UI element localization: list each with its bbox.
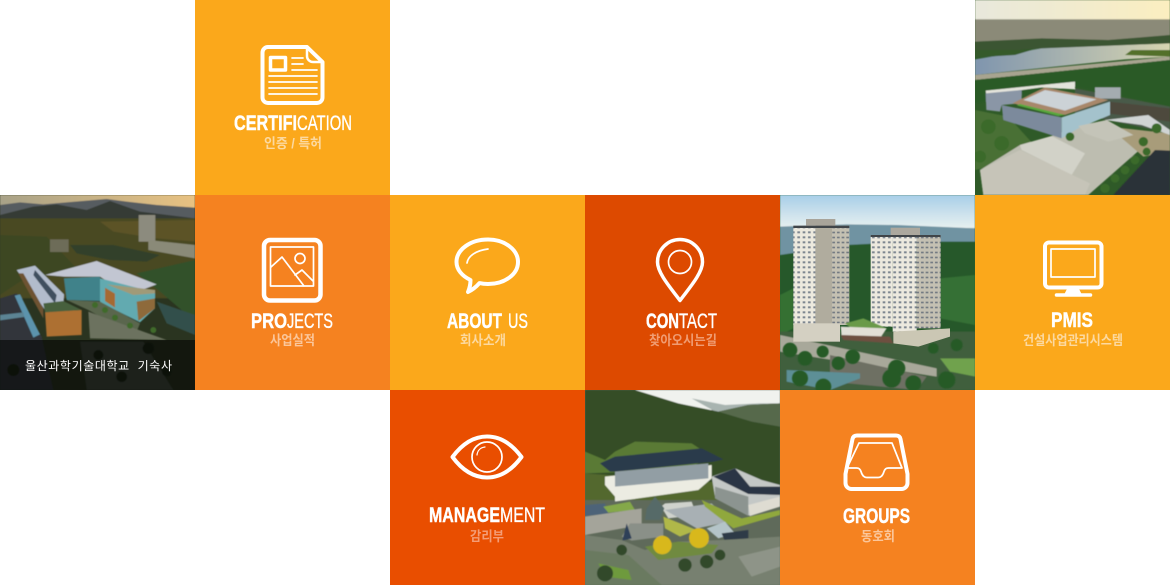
panel: projects	[195, 195, 390, 390]
icon: document	[262, 47, 322, 103]
photo: government hall	[585, 390, 780, 585]
caption bar	[0, 340, 195, 390]
subheading: 동호회	[861, 529, 895, 544]
heading: GROUPS	[843, 505, 910, 528]
panel: about us	[390, 195, 585, 390]
subheading: 사업실적	[270, 333, 315, 348]
heading: JECTS	[287, 310, 333, 333]
icon: map pin	[658, 240, 702, 300]
heading	[251, 310, 333, 333]
subheading: 회사소개	[460, 333, 506, 348]
heading: MENT	[500, 504, 545, 527]
icon: speech bubble	[456, 240, 518, 292]
heading: MANAGE	[429, 504, 500, 527]
tower left	[793, 219, 849, 342]
subheading: 건설사업관리시스템	[1023, 333, 1123, 348]
panel: management	[390, 390, 585, 585]
heading: PMIS	[1051, 309, 1093, 332]
tower right	[871, 228, 950, 347]
heading: PRO	[251, 310, 287, 333]
subheading: 감리부	[470, 529, 504, 544]
heading	[646, 310, 717, 333]
heading: US	[508, 310, 528, 333]
subheading: 찾아오시는길	[649, 333, 717, 348]
heading	[234, 112, 352, 135]
photo: apartment towers	[780, 195, 975, 390]
heading: TACT	[679, 310, 717, 333]
icon: tray	[846, 436, 908, 489]
icon: eye	[452, 436, 522, 478]
icon: picture	[264, 240, 320, 300]
icon: monitor	[1045, 242, 1102, 295]
subheading: 인증 / 특허	[264, 136, 322, 151]
heading: ABOUT	[447, 310, 502, 333]
panel: pmis	[975, 195, 1170, 390]
panel: contact	[585, 195, 780, 390]
caption text: 울산과학기술대학교 기숙사	[25, 359, 172, 373]
heading: CATION	[297, 112, 352, 135]
panel: groups	[780, 390, 975, 585]
photo: riverside hall	[975, 0, 1170, 195]
heading: CON	[646, 310, 679, 333]
heading: CERTIFI	[234, 112, 297, 135]
photo: Ulsan dormitory	[0, 195, 195, 390]
panel: certification	[195, 0, 390, 195]
